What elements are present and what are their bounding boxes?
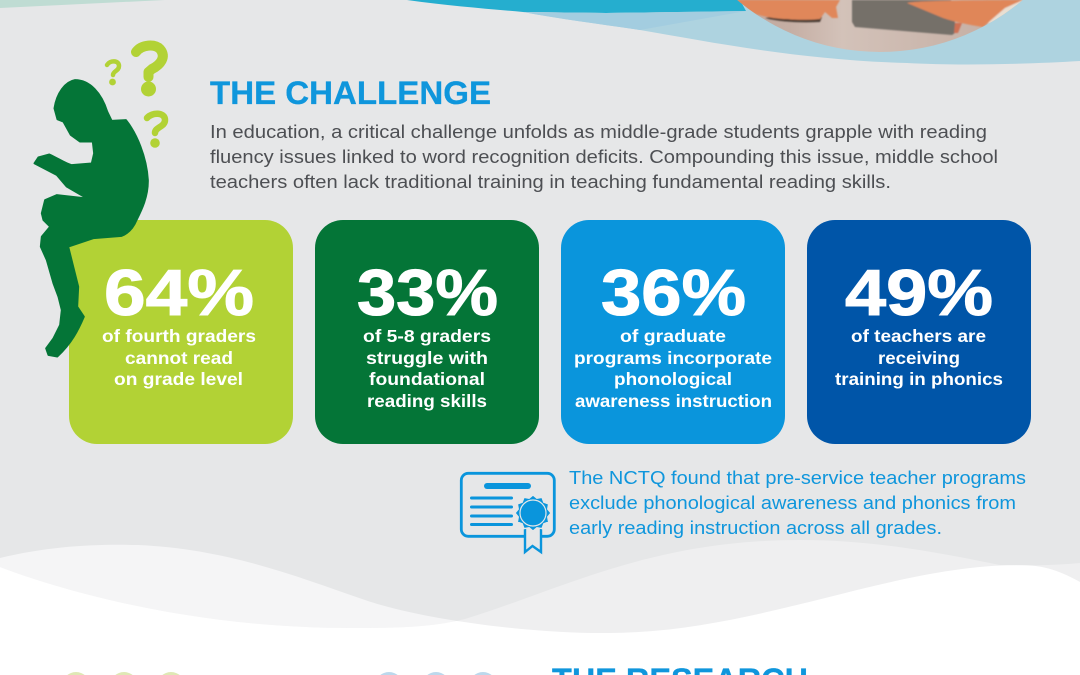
card: 33%: of 5-8 graders	[363, 326, 491, 346]
icon: question marks	[107, 46, 165, 148]
body text: challenge description: In education, a critical challenge unfolds as middle-grade students grapple with reading	[210, 121, 987, 142]
card: 64%	[69, 220, 293, 444]
icon: certificate	[461, 473, 554, 552]
card: 49%	[807, 220, 1031, 444]
card: 33%	[315, 220, 539, 444]
card: 33%: struggle with	[366, 348, 488, 368]
bottom waves	[0, 540, 1080, 675]
card: 64%: on grade level	[114, 369, 243, 389]
card: 36%	[561, 220, 785, 444]
card: 49%: 49%	[845, 256, 993, 329]
heading: the challenge: THE CHALLENGE	[210, 75, 491, 111]
card: 33%: foundational	[369, 369, 485, 389]
card: 49%: receiving	[878, 348, 960, 368]
card: 33%: reading skills	[367, 391, 487, 411]
card: 64%: cannot read	[125, 348, 233, 368]
card: 64%: of fourth graders	[102, 326, 256, 346]
body text: challenge description: fluency issues linked to word recognition deficits. Compounding this issue, middle school	[210, 146, 998, 167]
callout: NCTQ finding: exclude phonological awareness and phonics from	[569, 493, 1016, 513]
small question mark	[107, 61, 119, 85]
card: 49%: training in phonics	[835, 369, 1003, 389]
card: 36%: of graduate	[620, 326, 726, 346]
decorative green dots	[62, 672, 185, 675]
photo: hands on tablet	[737, 0, 1023, 52]
card: 36%: phonological	[614, 369, 732, 389]
icon: boy reading silhouette	[34, 80, 148, 357]
callout: NCTQ finding: The NCTQ found that pre-service teacher programs	[569, 468, 1026, 488]
body text: challenge description	[210, 121, 998, 192]
body text: challenge description: teachers often lack traditional training in teaching fundamental reading skills.	[210, 171, 891, 192]
decorative blue dots	[375, 672, 497, 675]
card: 49%: of teachers are	[851, 326, 986, 346]
medium question mark	[147, 114, 165, 148]
large question mark	[136, 46, 163, 96]
card: 36%: 36%	[601, 256, 746, 329]
top waves	[0, 0, 1080, 64]
card: 33%: 33%	[357, 256, 498, 329]
callout: NCTQ finding	[569, 468, 1026, 538]
card: 64%: 64%	[104, 256, 254, 329]
callout: NCTQ finding: early reading instruction across all grades.	[569, 518, 942, 538]
card: 36%: programs incorporate	[574, 348, 772, 368]
card: 36%: awareness instruction	[575, 391, 772, 411]
